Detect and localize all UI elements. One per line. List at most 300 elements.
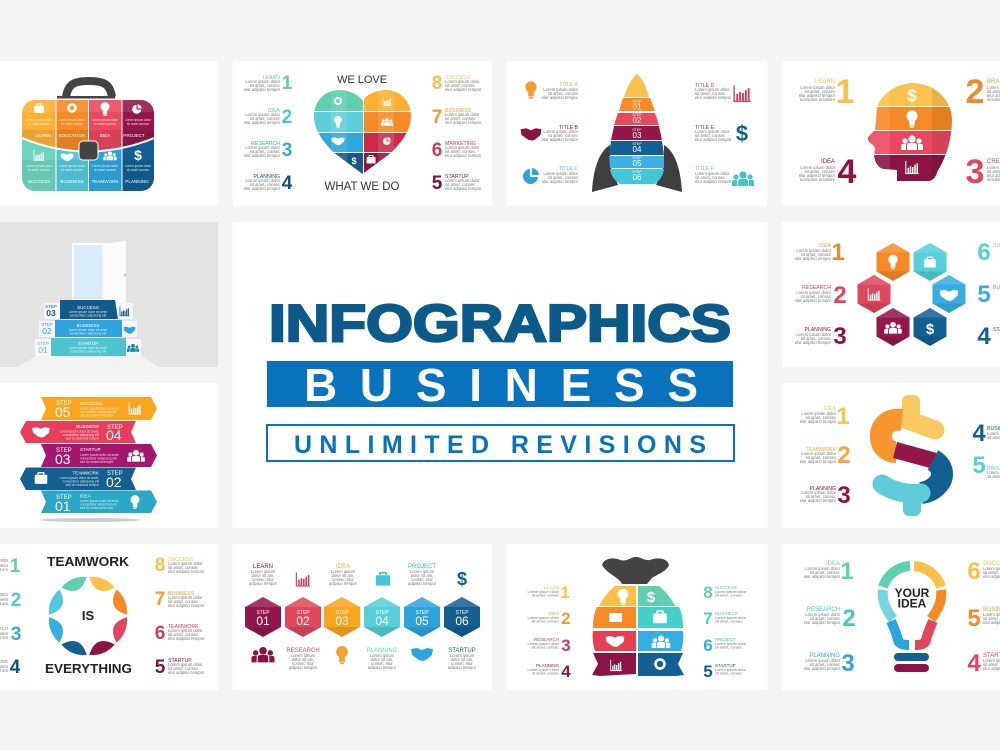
ring right list: TEAMWORK	[168, 624, 199, 630]
bulb right list: 4	[967, 650, 981, 677]
briefcase labels: Lorem ipsum dolor	[26, 118, 53, 122]
heart right list: Lorem ipsum dolor	[445, 145, 480, 150]
briefcase labels: BUSINESS	[60, 179, 84, 184]
arrows shadow	[40, 518, 140, 522]
rocket right list: TITLE D	[695, 83, 715, 89]
top items row: dolor sit am,	[252, 573, 274, 578]
bulb right list	[967, 558, 1000, 677]
heart right list: 5	[432, 173, 443, 194]
top items row: dolor sit am,	[332, 573, 354, 578]
step 1: STEP	[37, 341, 49, 346]
heart heading: we love: WE LOVE	[337, 74, 387, 86]
ring right list: elur adipisci tempor	[168, 603, 205, 608]
step 1: 01	[38, 345, 48, 355]
arrow step 1	[41, 490, 157, 514]
bottom items row: Lorem ipsum	[291, 653, 316, 658]
ring right list: sit amet, consec	[168, 632, 198, 637]
arrow step 2: sed do eiusmod tempor	[66, 483, 100, 487]
rocket fins	[592, 145, 682, 192]
briefcase lower pockets	[22, 137, 154, 191]
heart right list: BUSINESS	[445, 108, 472, 114]
heart right list: 7	[432, 107, 442, 128]
briefcase upper pockets	[22, 100, 154, 150]
heart left list: sit amet, consec	[250, 182, 280, 187]
bag right list: sit amet, consec	[715, 620, 743, 624]
hexagon left list: 3	[833, 323, 847, 350]
briefcase labels: sit amet consec	[127, 122, 149, 126]
briefcase labels	[26, 118, 152, 184]
briefcase labels: sit amet consec	[94, 122, 116, 126]
panel: six hexagon steps infographic	[233, 544, 492, 690]
dollar left list: TEAMWORK	[805, 447, 837, 453]
bulb left list: 1	[840, 558, 854, 585]
bottom items row: STARTUP	[448, 648, 476, 654]
rocket right list: elur adipisci tempor	[695, 137, 732, 142]
hexagon left list: sit amet, consec	[801, 294, 831, 299]
hexagon step row: 01	[256, 614, 270, 628]
head left list: elur adipisci tempor	[799, 93, 836, 98]
heart right list: elur adipisci tempor	[445, 120, 482, 125]
arrow step 1: consectetur adipiscing elit	[80, 502, 117, 506]
bulb left list: sit amet, consec	[810, 616, 840, 621]
step 2: consectetur adipiscing elit	[70, 332, 106, 336]
step 3: SUCCESS	[77, 305, 99, 310]
bag right list: Lorem ipsum dolor	[715, 668, 747, 672]
rocket body: STEP	[632, 113, 642, 117]
hexagon left list: elur adipisci tempor	[795, 340, 832, 345]
bag left list: PLANNING	[536, 663, 559, 668]
dollar left list: sit amet, consec	[806, 455, 836, 460]
step 2: STEP	[41, 322, 53, 327]
step 1	[35, 338, 141, 356]
head right list: 2	[966, 73, 984, 111]
briefcase labels: SUCCESS	[28, 179, 50, 184]
panel: arrow steps infographic	[0, 383, 218, 528]
panel: teamwork ring infographic	[0, 544, 218, 690]
panel: hexagon ring infographic	[782, 222, 1000, 367]
rocket right list: sit amet, consec	[695, 175, 725, 180]
top items row	[249, 564, 467, 589]
bag left list: Lorem ipsum dolor	[528, 642, 560, 646]
arrow step 1: Lorem ipsum dolor sit amet,	[80, 499, 119, 503]
caption: everything: EVERYTHING	[45, 661, 132, 676]
hexagon left list: 2	[833, 282, 847, 309]
bag left list: RESEARCH	[534, 637, 559, 642]
rocket right list: Lorem ipsum dolor	[695, 171, 730, 176]
heart right list: SUCCESS	[445, 75, 471, 81]
heart left list: 2	[282, 107, 292, 128]
heart caption: what we do: WHAT WE DO	[325, 181, 400, 193]
heart right list: elur adipisci tempor	[445, 186, 482, 191]
top items row: LEARN	[253, 564, 273, 570]
briefcase labels: Lorem ipsum dolor	[125, 118, 152, 122]
bulb left list: PLANNING	[809, 653, 840, 659]
step 2: 02	[42, 326, 52, 336]
heart right list: 8	[432, 73, 442, 94]
bag body: $	[647, 589, 656, 606]
heart left list: PLANNING	[253, 174, 280, 180]
bulb text: your idea: IDEA	[898, 596, 927, 610]
ring left numbers: 2	[11, 590, 21, 611]
bottom items row: dolor sit am,	[371, 657, 393, 662]
arrow step 3: Lorem ipsum dolor sit amet,	[80, 453, 119, 457]
panel: money bag infographic	[507, 544, 767, 690]
banner: business: BUSINESS	[304, 359, 698, 411]
bottom items row: consec etur	[451, 661, 473, 666]
rocket body: STEP	[632, 100, 642, 104]
rocket body: STEP	[632, 156, 642, 160]
ring right list: BUSINESS	[168, 591, 195, 597]
ring right list	[155, 555, 205, 678]
bag left list	[528, 583, 571, 681]
rocket body: STEP	[632, 170, 642, 174]
hexagon right list	[977, 239, 1000, 350]
bag body	[592, 586, 684, 676]
heart left list: sit amet, consec	[250, 83, 280, 88]
heart right list: sit amet, consec	[445, 149, 475, 154]
bulb left list: RESEARCH	[807, 607, 840, 613]
arrow step 5	[41, 397, 157, 420]
briefcase labels: Lorem ipsum dolor	[59, 164, 86, 168]
title: infographics: INFOGRAPHICS	[269, 295, 731, 353]
rocket left list: TITLE B	[559, 125, 579, 131]
ring right list: STARTUP	[168, 658, 192, 664]
briefcase labels: TEAMWORK	[91, 179, 119, 184]
bulb left list: elur adipisci tempor	[804, 620, 841, 625]
bag right list: Lorem ipsum dolor	[715, 590, 747, 594]
bottom items row: dolor sit am,	[292, 657, 314, 662]
heart shape	[314, 90, 412, 174]
heart right list: 6	[432, 140, 442, 161]
bag left list: sit amet, consec	[532, 672, 559, 676]
arrow step 4: BUSINESS	[76, 424, 99, 429]
rocket right list: $	[736, 121, 748, 146]
briefcase handle	[57, 81, 115, 98]
briefcase labels: sit amet consec	[28, 168, 50, 172]
rocket body: 06	[633, 173, 642, 182]
briefcase labels: sit amet consec	[61, 168, 83, 172]
panel: head infographic	[782, 61, 1000, 206]
bottom items row: adipisci tempor	[289, 665, 318, 670]
banner: unlimited revisions: UNLIMITED REVISIONS	[294, 431, 706, 459]
rocket left list: Lorem ipsum dolor	[543, 87, 579, 92]
floor	[18, 356, 159, 367]
bag right list: Lorem ipsum dolor	[715, 642, 747, 646]
arrow step 5: SUCCESS	[80, 401, 102, 406]
hexagon left list: sit amet, consec	[801, 336, 831, 341]
bottom items row: consec etur	[292, 661, 314, 666]
heart left list: LEARN	[263, 75, 280, 81]
bag right list	[703, 583, 747, 681]
head left list: IDEA	[821, 159, 835, 165]
top items row: Lorem ipsum	[251, 569, 276, 574]
rocket left list	[521, 81, 579, 184]
dollar right list: 5	[972, 452, 986, 479]
bag left list: sit amet, consec	[532, 594, 559, 598]
rocket body: 04	[633, 145, 642, 154]
dollar left list: elur adipisci tempor	[800, 419, 837, 424]
rocket right list: Lorem ipsum dolor	[695, 87, 730, 92]
arrow step 2: Lorem ipsum dolor sit amet,	[60, 476, 99, 480]
panel: light bulb infographic	[782, 544, 1000, 690]
dollar right list: 4	[972, 420, 986, 447]
ring left numbers: 1	[10, 556, 21, 577]
bag left list: Lorem ipsum dolor	[528, 590, 560, 594]
panel: briefcase infographic	[0, 61, 218, 206]
arrow step 2: 02	[106, 474, 122, 490]
bulb left list: Lorem ipsum dolor	[805, 658, 841, 663]
arrow step 5: 05	[55, 404, 71, 420]
arrow step 4: consectetur adipiscing elit	[62, 433, 99, 437]
head left list	[799, 73, 857, 191]
arrow step 1: STEP	[56, 495, 72, 501]
bulb left list	[804, 558, 856, 677]
ring left numbers: 3	[11, 624, 21, 645]
top items row: Lorem ipsum	[331, 569, 356, 574]
heart left list: Lorem ipsum dolor	[245, 178, 281, 183]
arrow step 5: STEP	[56, 401, 72, 407]
briefcase labels: sit amet consec	[94, 168, 116, 172]
step 1: consectetur adipiscing elit	[70, 350, 106, 354]
heart shape: $	[351, 156, 357, 166]
arrow step 4	[20, 421, 136, 443]
heart right list	[432, 73, 482, 194]
rocket right list: TITLE E	[695, 125, 715, 131]
dollar left list: Lorem ipsum dolor	[801, 490, 837, 495]
ring right list: 6	[155, 623, 165, 644]
bag left list: IDEA	[548, 611, 559, 616]
bottom items row: RESEARCH	[286, 648, 320, 654]
heart right list: STARTUP	[445, 174, 469, 180]
bag right list: 8	[703, 583, 713, 602]
bottom items row: Lorem ipsum	[450, 653, 475, 658]
dollar right list: Lorem	[987, 470, 999, 475]
dollar left list: sit amet, consec	[806, 415, 836, 420]
bag left list: 4	[561, 662, 571, 681]
rocket left list: Lorem ipsum dolor	[543, 129, 579, 134]
ring right list: Lorem ipsum dolor	[168, 595, 203, 600]
ring left numbers: 4	[10, 657, 21, 678]
bulb right list: sit amet	[983, 662, 998, 667]
briefcase labels: Lorem ipsum dolor	[26, 164, 53, 168]
heart right list: MARKETING	[445, 141, 476, 147]
heart right list: Lorem ipsum dolor	[445, 112, 480, 117]
ring right list: 7	[155, 589, 165, 610]
bag right list: sit amet, consec	[715, 646, 743, 650]
rocket body: STEP	[632, 142, 642, 146]
arrow step 3: STARTUP	[80, 447, 101, 452]
briefcase labels: sit amet consec	[61, 122, 83, 126]
dollar left list: Lorem ipsum dolor	[801, 411, 837, 416]
arrow step 2: TEAMWORK	[72, 470, 99, 476]
briefcase labels: sit amet consec	[127, 168, 149, 172]
hexagon right list: 4	[977, 323, 991, 350]
rocket left list: elur adipisci tempor	[542, 137, 579, 142]
bag right list: sit amet, consec	[715, 594, 743, 598]
briefcase clasp	[79, 141, 98, 160]
arrow step 3: sed do eiusmod tempor	[80, 460, 114, 464]
bag right list: 7	[703, 609, 713, 628]
briefcase labels: Lorem ipsum dolor	[92, 118, 119, 122]
rocket right list	[695, 83, 754, 186]
heart left list: 4	[282, 173, 293, 194]
bag right list: 5	[703, 662, 713, 681]
briefcase labels: IDEA	[100, 133, 111, 138]
hexagon cluster	[858, 243, 966, 346]
briefcase labels: Lorem ipsum dolor	[59, 118, 86, 122]
heart left list: elur adipisci tempor	[244, 186, 281, 191]
hexagon left list: Lorem ipsum dolor	[796, 332, 832, 337]
heart right list: Lorem ipsum dolor	[445, 178, 480, 183]
dollar left list: PLANNING	[809, 486, 836, 492]
center word: is: IS	[82, 608, 94, 623]
bulb right list: sit amet	[983, 570, 998, 575]
hexagon step row: STEP	[296, 610, 310, 616]
top items row: adipisci tempor	[329, 581, 358, 586]
bulb left list: Lorem ipsum dolor	[805, 612, 841, 617]
briefcase icons	[34, 102, 142, 163]
banner: unlimited revisions	[267, 425, 734, 461]
briefcase labels: PLANNING	[125, 179, 149, 184]
bottom items row: consec etur	[371, 661, 393, 666]
ring right list: elur adipisci tempor	[168, 569, 205, 574]
dollar left list: Lorem ipsum dolor	[801, 451, 837, 456]
ring right list: sit amet, consec	[168, 565, 198, 570]
dollar left list: 2	[837, 442, 851, 469]
bulb left list: sit amet, consec	[810, 662, 840, 667]
hexagon left list: sit amet, consec	[801, 252, 831, 257]
bag right list: BUSINESS	[715, 611, 738, 616]
bulb outline	[883, 566, 941, 645]
bottom items row	[251, 646, 477, 670]
dollar left list: IDEA	[824, 406, 837, 412]
hexagon left list: Lorem ipsum dolor	[796, 248, 832, 253]
briefcase labels: EDUCATION	[59, 133, 85, 138]
step 2: Lorem ipsum dolor sit amet	[69, 328, 107, 332]
hexagon step row: STEP	[415, 610, 429, 616]
hexagon step row: STEP	[375, 610, 389, 616]
bottom items row: Lorem ipsum	[370, 653, 395, 658]
panel: central title card	[233, 222, 767, 528]
heart left list: Lorem ipsum dolor	[245, 79, 281, 84]
dollar right list: Lorem	[987, 431, 999, 436]
step 2: BUSINESS	[77, 323, 99, 328]
heart left list: RESEARCH	[251, 141, 280, 147]
rocket left list: elur adipisci tempor	[542, 95, 579, 100]
briefcase icons: $	[134, 147, 142, 163]
panel: dollar puzzle infographic	[782, 383, 1000, 528]
rocket left list: TITLE A	[559, 82, 579, 88]
ring right list: Lorem ipsum dolor	[168, 662, 203, 667]
dollar left list: elur adipisci tempor	[800, 459, 837, 464]
arrow step 1: sed do eiusmod tempor	[80, 506, 114, 510]
arrow step 4: 04	[106, 427, 122, 443]
ring right list: elur adipisci tempor	[168, 636, 205, 641]
head shape: $	[907, 86, 917, 105]
top items row: consec etur	[252, 577, 274, 582]
panel: rocket infographic	[507, 61, 767, 206]
briefcase labels: Lorem ipsum dolor	[92, 164, 119, 168]
hexagon step row: 03	[335, 614, 349, 628]
heart right list: elur adipisci tempor	[445, 153, 482, 158]
dollar left list	[800, 403, 851, 509]
step 3: STEP	[45, 304, 57, 309]
step 3: Lorem ipsum dolor sit amet	[69, 310, 107, 314]
hexagon right list: 5	[977, 281, 991, 308]
rocket left list: TITLE C	[559, 166, 578, 172]
rocket body: 02	[633, 116, 642, 125]
hexagon right list: 6	[977, 239, 991, 266]
head left list: LEARN	[815, 79, 835, 85]
bag right list: STARTUP	[715, 663, 736, 668]
head left list: incididunt ut labore	[800, 97, 836, 102]
ring right list: Lorem ipsum dolor	[168, 561, 203, 566]
heart right list: sit amet, consec	[445, 83, 475, 88]
ring left numbers	[0, 556, 21, 678]
arrow step 3: STEP	[56, 448, 72, 454]
hexagon left list: IDEA	[819, 243, 832, 249]
head right list: 3	[966, 153, 984, 191]
arrow step 3: 03	[55, 451, 71, 467]
head shape	[868, 83, 952, 181]
heart right list: Lorem ipsum dolor	[445, 79, 480, 84]
hexagon step row: STEP	[335, 610, 349, 616]
bulb left list: IDEA	[826, 561, 840, 567]
arrow step 3: consectetur adipiscing elit	[80, 456, 117, 460]
rocket left list: Lorem ipsum dolor	[543, 171, 579, 176]
step 3	[44, 300, 133, 319]
rocket right list: sit amet, consec	[695, 91, 725, 96]
heart left list: 3	[282, 140, 292, 161]
head left list: elur adipisci tempor	[799, 173, 836, 178]
dollar left list: 1	[836, 403, 850, 430]
head left list: Lorem ipsum dolor	[800, 85, 836, 90]
bag right list: 6	[703, 636, 713, 655]
heading: teamwork: TEAMWORK	[47, 554, 130, 569]
bag left list: LEARN	[544, 585, 559, 590]
bottom items row: dolor sit am,	[451, 657, 473, 662]
bag left list: 3	[561, 636, 571, 655]
rocket left list: sit amet, consec	[548, 133, 578, 138]
step 1: STARTUP	[78, 341, 98, 346]
dollar left list: 3	[837, 482, 851, 509]
bag left list: Lorem ipsum dolor	[528, 668, 560, 672]
bag left list: sit amet, consec	[532, 646, 559, 650]
rocket body: 05	[633, 159, 642, 168]
ring right list: SUCCESS	[168, 557, 194, 563]
bulb base	[894, 653, 929, 672]
top items row: consec etur	[332, 577, 354, 582]
rocket body	[609, 74, 664, 184]
bulb right list: 5	[967, 605, 981, 632]
bulb left list: elur adipisci tempor	[804, 574, 841, 579]
arrow step 2: consectetur adipiscing elit	[62, 480, 99, 484]
head right list	[966, 73, 1000, 191]
hexagon left list: RESEARCH	[802, 285, 831, 291]
rocket right list: sit amet, consec	[695, 133, 725, 138]
briefcase labels: Lorem ipsum dolor	[125, 164, 152, 168]
hexagon cluster: $	[926, 321, 935, 338]
bottom items row: adipisci tempor	[448, 665, 477, 670]
rocket body: 01	[633, 102, 642, 112]
bottom items row: PLANNING	[367, 648, 398, 654]
arrow step 2	[20, 468, 136, 490]
ring right list: sit amet, consec	[168, 666, 198, 671]
bulb left list: elur adipisci tempor	[804, 666, 841, 671]
head left list: 1	[836, 73, 854, 111]
bottom items row: adipisci tempor	[368, 665, 397, 670]
heart left list: sit amet, consec	[250, 149, 280, 154]
